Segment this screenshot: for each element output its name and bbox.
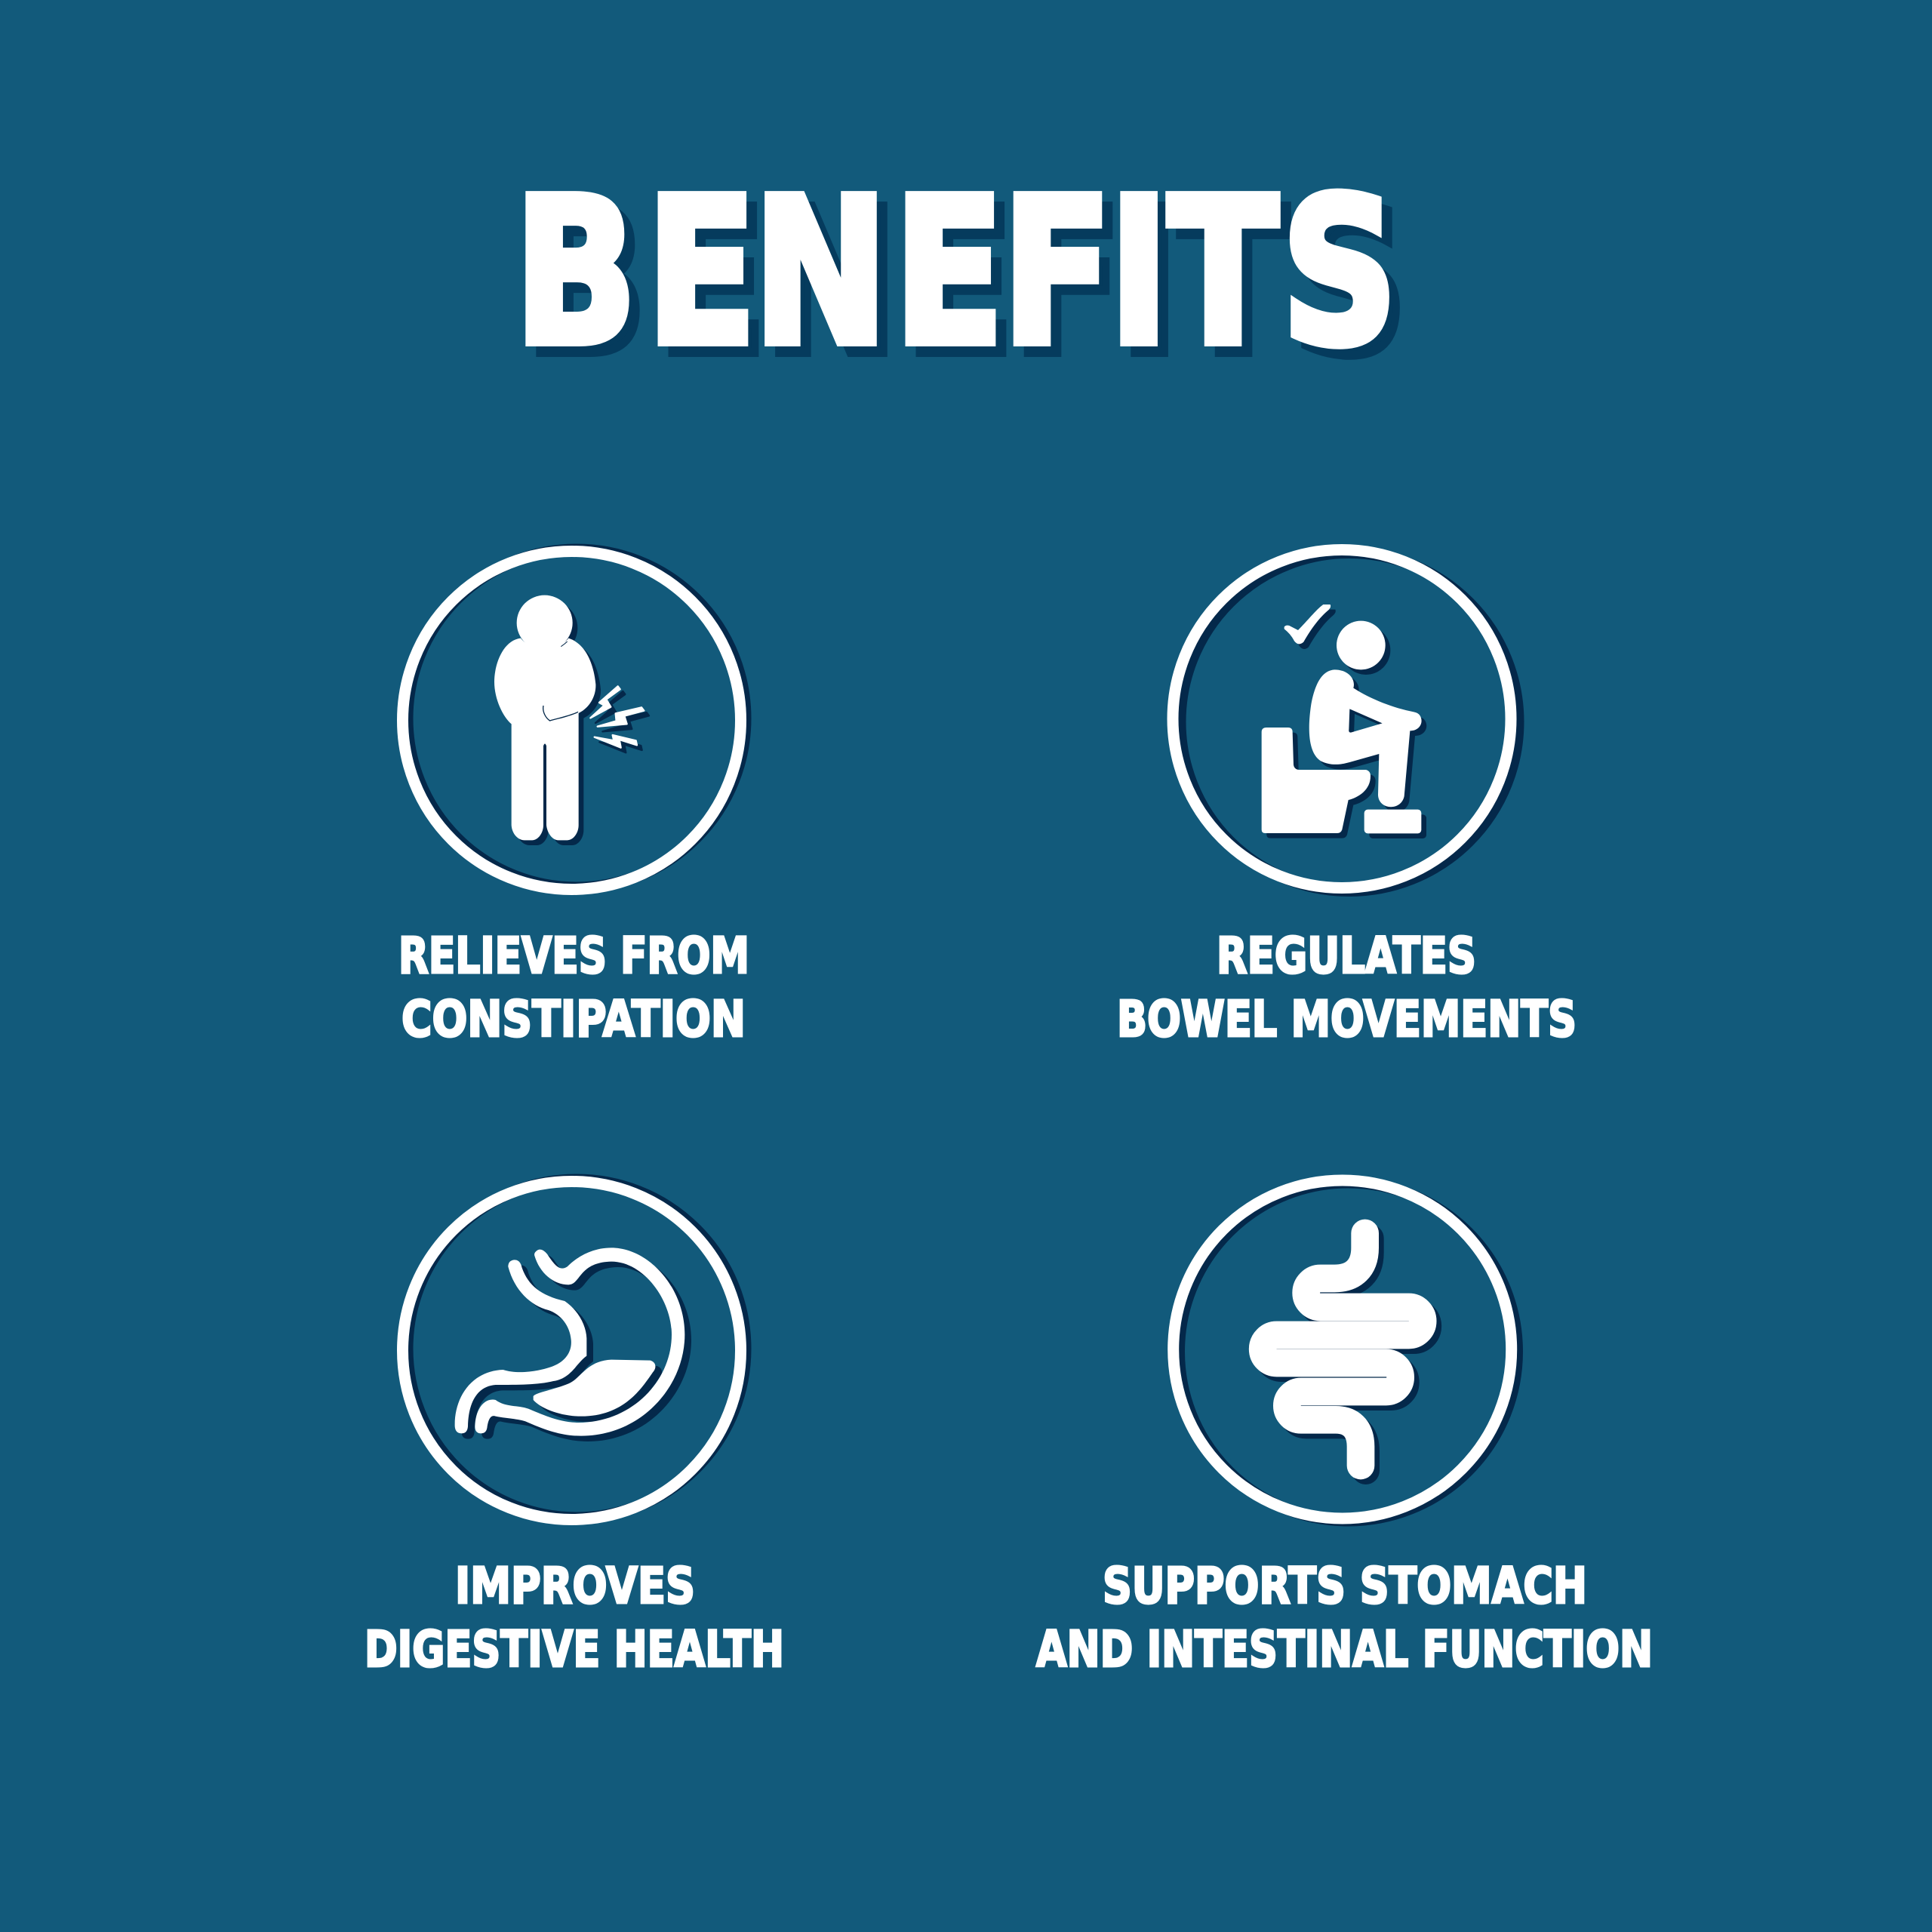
title: BENEFITS (525, 166, 1408, 400)
ring: regulates (1173, 549, 1518, 891)
label: relieves from constipation: RELIEVES FROM (398, 928, 749, 985)
label: supports stomach and intestinal function: AND INTESTINAL FUNCTION (1036, 1621, 1653, 1678)
panel: supports stomach and intestinal function (1036, 1180, 1653, 1678)
ring: intestines (1174, 1180, 1517, 1521)
panel: improves digestive health (365, 1180, 784, 1678)
icon: person holding stomach (494, 595, 601, 845)
label: improves digestive health (365, 1558, 784, 1678)
label: improves digestive health: IMPROVES (455, 1558, 695, 1615)
label: relieves from constipation (398, 928, 749, 1048)
label: supports stomach and intestinal function (1036, 1558, 1653, 1678)
icon: person on toilet with footstool and check mark (1262, 605, 1426, 838)
label: regulates bowel movements: REGULATES (1217, 928, 1476, 985)
label: relieves from constipation: CONSTIPATION (401, 991, 746, 1048)
panel: regulates bowel movements (1117, 549, 1577, 1048)
label: regulates bowel movements (1117, 928, 1577, 1048)
panel: relieves from constipation (398, 549, 749, 1048)
label: improves digestive health: DIGESTIVE HEALTH (365, 1621, 784, 1678)
label: regulates bowel movements: BOWEL MOVEMENTS (1117, 991, 1577, 1048)
ring: stomach (403, 1180, 746, 1520)
ring: constipation (403, 549, 746, 889)
icon: stomach (455, 1247, 691, 1441)
icon: intestines (1263, 1233, 1428, 1471)
label: supports stomach and intestinal function: SUPPORTS STOMACH (1103, 1558, 1587, 1615)
title: BENEFITS (515, 155, 1398, 389)
icon: pain bolts (590, 686, 649, 752)
